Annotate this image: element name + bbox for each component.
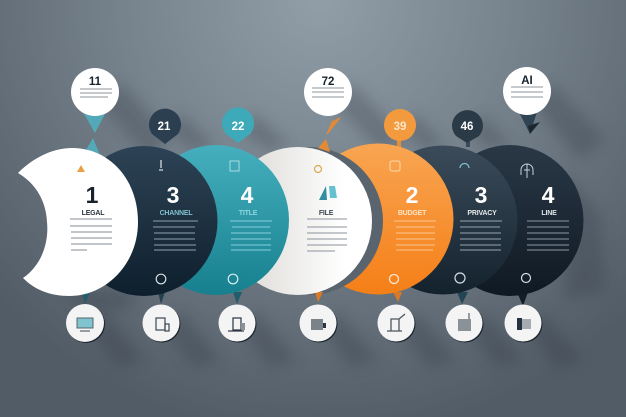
icon: small ring [156,274,166,284]
pointer [158,292,165,304]
lines [511,87,543,97]
ledger icon [458,313,471,331]
body lines [70,219,112,250]
panel: orange step 2 [302,138,454,302]
icon: small ring [390,274,398,284]
building icon [228,318,245,331]
icon: grid [230,161,239,171]
panel: white step 1 [18,148,138,304]
connector [397,138,401,148]
pointer [233,292,242,304]
number: 2 [406,182,418,208]
dark ribbon connector [519,112,540,134]
icon circle 5 [378,304,414,342]
value: 39 [394,121,406,133]
value: 46 [461,121,473,133]
icon circle 7 [504,304,542,342]
icon circle 6 [446,304,482,342]
body lines [153,221,198,250]
panel: navy step 3 [70,146,218,304]
book icon [517,318,531,330]
bubble: 11 [71,68,119,116]
pointer [457,292,468,304]
long shadows [60,82,605,368]
body lines [307,219,347,251]
orange ribbon connector [317,112,340,152]
body lines [460,221,502,250]
icon: chart logo [319,186,337,200]
icon: small ring [455,273,465,283]
icon circle 1 [66,304,104,342]
pointer [82,292,90,304]
icon: arc [460,164,469,168]
monitor icon [77,318,93,331]
icon: microphone [159,160,163,170]
value: 21 [158,121,171,133]
label: LINE [541,210,557,217]
lines [312,88,344,97]
icon: head [521,164,533,178]
badge: 39 [384,109,416,141]
panel: dark step 3 [368,135,518,304]
badge: 22 [222,107,254,143]
teal lower triangle [86,138,100,155]
document icon [156,318,169,331]
lines [80,89,112,97]
icon circle 2 [142,304,180,342]
panel: teal step 4 [143,145,289,304]
door icon [387,314,405,331]
label: BUDGET [398,210,427,217]
panel: white step 1b [224,147,372,302]
value: 72 [322,76,334,88]
number: 3 [475,182,487,208]
icon: tablet [390,161,400,171]
body lines [230,221,272,250]
label: TITLE [239,210,258,217]
icon circle 4 [300,304,336,342]
label: LEGAL [82,210,105,217]
icon: orange house [77,165,85,172]
bubble: AI [503,67,551,115]
number: 4 [241,182,254,208]
icon: small target [314,166,322,172]
form icon [311,319,326,330]
label: FILE [319,210,334,217]
crescent shadow behind white panel [235,147,383,295]
body lines [394,221,436,250]
label: PRIVACY [467,210,497,217]
icon: small ring [228,274,238,284]
icon: small ring [522,274,530,282]
number: 1 [86,182,99,208]
value: 11 [89,76,102,88]
label: CHANNEL [160,210,193,217]
pointer [393,292,402,302]
pointer [315,292,323,302]
badge: 46 [452,110,483,143]
bubble: 72 [304,68,352,116]
connector [466,135,470,147]
icon circle 3 [218,304,256,342]
value: 22 [232,121,244,133]
badge: 21 [149,109,181,144]
pointer [517,292,528,306]
number: 3 [167,182,179,208]
panel: dark step 4 [436,145,584,306]
number: 4 [542,182,555,208]
value: AI [521,75,533,87]
teal ribbon connector [83,112,106,133]
body lines [527,221,569,250]
